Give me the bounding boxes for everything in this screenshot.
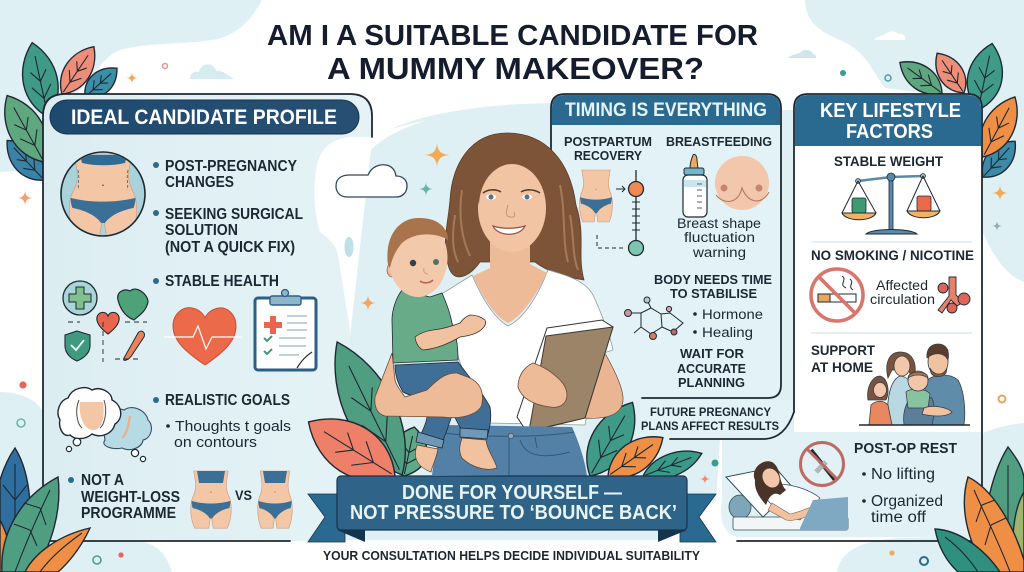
baby legs	[395, 362, 491, 440]
icon: blood vessels	[938, 277, 970, 313]
footer text: YOUR CONSULTATION HELPS DECIDE INDIVIDUAL SUITABILITY	[323, 548, 700, 563]
text: realistic goals	[153, 392, 291, 451]
text: breast shape warning: Breast shape	[677, 216, 761, 231]
heading: ideal candidate profile	[50, 100, 359, 134]
hair back	[445, 133, 584, 280]
text: future pregnancy plans: FUTURE PREGNANCY	[650, 405, 771, 419]
leaves: top left	[0, 39, 124, 189]
text: postpartum recovery: RECOVERY	[574, 148, 642, 163]
illustration: mother holding baby	[375, 133, 623, 476]
icon: bodies comparison	[191, 471, 292, 528]
title	[267, 20, 758, 86]
text: post-op rest: time off	[871, 509, 927, 526]
text: realistic goals: REALISTIC GOALS	[165, 392, 290, 409]
text: wait for accurate planning: PLANNING	[678, 375, 745, 390]
panel: key lifestyle factors	[670, 94, 982, 541]
icon: health symbols cluster	[63, 281, 148, 362]
leaves: centre bottom	[295, 331, 706, 497]
text: future pregnancy plans: PLANS AFFECT RESULTS	[641, 419, 779, 433]
text: body needs time to stabilise: BODY NEEDS TIME	[654, 272, 772, 287]
heading: timing is everything: TIMING IS EVERYTHING	[565, 100, 767, 121]
text: no smoking / nicotine: NO SMOKING / NICOTINE	[811, 247, 974, 263]
text: breastfeeding: BREASTFEEDING	[666, 134, 772, 149]
hand on book	[518, 363, 567, 407]
icon: family	[859, 344, 970, 425]
text: post-op rest: No lifting	[871, 466, 935, 483]
text: not a weight-loss programme: WEIGHT-LOSS	[81, 489, 180, 506]
text: post-op rest: Organized	[871, 493, 943, 510]
text: wait for accurate planning: WAIT FOR	[680, 346, 745, 361]
text: post-pregnancy changes	[153, 158, 298, 191]
leaves: bottom right	[935, 447, 1024, 572]
face	[478, 164, 546, 252]
mother's holding arm	[375, 353, 482, 418]
heading: timing is everything	[552, 95, 780, 125]
icon: small cloud outline	[336, 165, 407, 197]
text: not a weight-loss programme: NOT A	[81, 472, 124, 489]
jeans	[432, 425, 587, 476]
text: realistic goals: on contours	[174, 434, 257, 451]
neck and chest	[473, 240, 547, 323]
text: affected circulation: circulation	[870, 292, 935, 307]
text: post-op rest	[854, 441, 957, 526]
heading: key lifestyle factors: FACTORS	[846, 121, 933, 143]
panel: ideal candidate profile	[43, 94, 372, 541]
text: affected circulation: Affected	[876, 278, 928, 293]
leaves: top right	[893, 40, 1024, 185]
text: breast shape warning	[677, 216, 761, 260]
icon: recovery timeline	[580, 170, 644, 256]
text: support at home	[811, 342, 875, 375]
text: realistic goals: Thoughts t goals	[175, 418, 291, 435]
text: seeking surgical solution: SOLUTION	[165, 222, 238, 239]
text: seeking surgical solution	[153, 206, 303, 256]
text: body needs time to stabilise: TO STABILISE	[670, 286, 757, 301]
icon: breast circle	[715, 156, 769, 210]
right arm	[550, 350, 623, 418]
icon: bodies comparison: VS	[235, 488, 252, 503]
baby arm	[415, 315, 486, 350]
icon: no lifting sign	[800, 442, 844, 486]
title: AM I A SUITABLE CANDIDATE FOR	[267, 20, 758, 52]
icon: torso in circle	[61, 152, 145, 237]
text: post-pregnancy changes: POST-PREGNANCY	[165, 158, 298, 175]
text: postpartum recovery: POSTPARTUM	[564, 134, 652, 149]
leaves: bottom left	[0, 448, 90, 572]
book	[517, 320, 613, 432]
icon: woman resting in bed	[726, 461, 848, 530]
white swoosh behind left panel	[315, 120, 427, 328]
baby shirt	[392, 290, 458, 363]
text: hormone and healing: Hormone	[702, 307, 763, 322]
icon: heart with pulse	[164, 308, 242, 365]
heading: ideal candidate profile: IDEAL CANDIDATE PROFILE	[71, 106, 337, 129]
baby head	[387, 263, 397, 277]
text: affected circulation	[870, 278, 935, 307]
banner: done for yourself: NOT PRESSURE TO ‘BOUNCE BACK’	[350, 502, 677, 524]
icon: clipboard	[255, 290, 316, 370]
text: not a weight-loss programme	[68, 472, 180, 522]
text: stable weight: STABLE WEIGHT	[834, 153, 943, 169]
text: wait for accurate planning	[677, 346, 746, 390]
text: seeking surgical solution: SEEKING SURGICAL	[165, 206, 303, 223]
icon: baby bottle	[683, 154, 707, 217]
text: seeking surgical solution: (NOT A QUICK FIX)	[165, 239, 295, 256]
icon: hormone molecule	[624, 297, 683, 340]
text: future pregnancy plans	[641, 405, 779, 433]
icon: balance scale	[842, 173, 940, 234]
heading: key lifestyle factors	[795, 95, 981, 146]
title: A MUMMY MAKEOVER?	[327, 51, 704, 86]
text: post-op rest: POST-OP REST	[854, 441, 957, 457]
text: hormone and healing	[693, 307, 763, 340]
text: postpartum recovery	[564, 134, 652, 163]
text: stable health: STABLE HEALTH	[165, 273, 279, 290]
text: support at home: SUPPORT	[811, 342, 875, 358]
banner: done for yourself: DONE FOR YOURSELF —	[402, 482, 622, 504]
icon: no smoking sign	[811, 269, 863, 321]
icon: thought clouds	[58, 388, 151, 462]
panel: timing is everything	[551, 94, 794, 440]
text: hormone and healing: Healing	[702, 325, 753, 340]
banner: done for yourself	[308, 476, 716, 542]
shirt	[440, 270, 613, 425]
text: breast shape warning: warning	[692, 245, 746, 260]
text: wait for accurate planning: ACCURATE	[677, 361, 746, 376]
text: post-pregnancy changes: CHANGES	[165, 174, 234, 191]
text: support at home: AT HOME	[811, 359, 873, 375]
text: not a weight-loss programme: PROGRAMME	[81, 505, 176, 522]
text: body needs time to stabilise	[654, 272, 772, 301]
text: breast shape warning: fluctuation	[684, 230, 755, 245]
heading: key lifestyle factors: KEY LIFESTYLE	[820, 100, 961, 122]
